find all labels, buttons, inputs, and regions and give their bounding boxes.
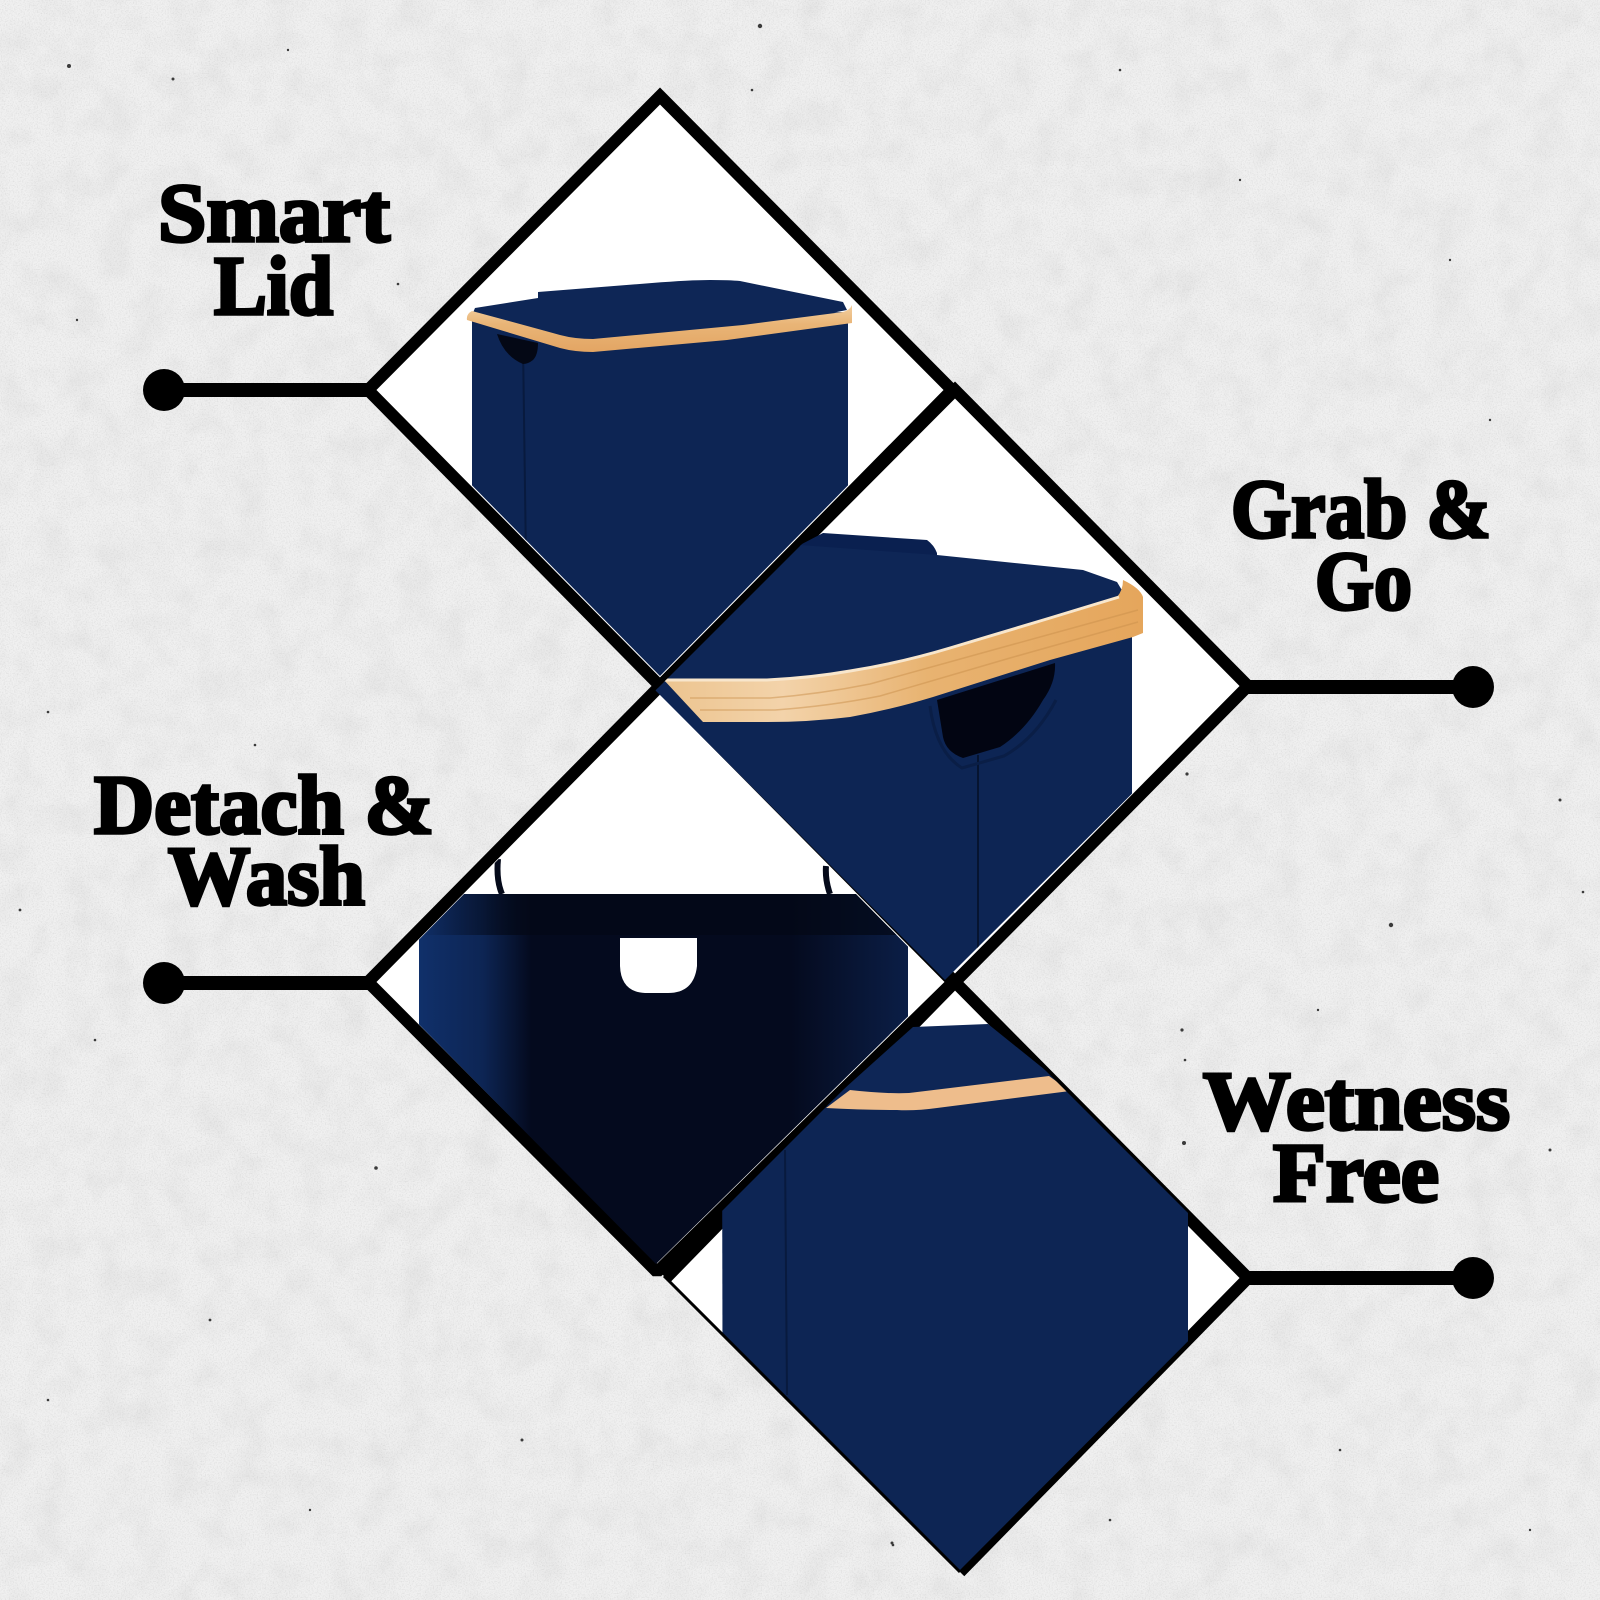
panel: detach and wash diamond [143,686,953,1300]
heading: grab and go: Grab & [1231,463,1491,556]
panel: wetness free diamond [664,982,1494,1600]
heading: smart lid [158,167,390,333]
panel: smart lid diamond [143,96,952,690]
panel: grab and go diamond [640,390,1494,1000]
heading: grab and go: Go [1315,535,1412,628]
heading: smart lid: Lid [214,240,333,333]
product: box with lid [467,280,852,690]
connector: smart lid [143,369,368,411]
product: close-up box [640,533,1143,1000]
heading: wetness free [1203,1055,1510,1220]
product: liner bag [419,859,908,1300]
heading: detach and wash: Detach & [94,759,434,852]
heading: smart lid: Smart [158,167,390,260]
heading: detach and wash: Wash [168,830,365,923]
product: box from the front [722,1024,1188,1600]
heading: detach and wash [94,759,434,923]
heading: wetness free: Free [1273,1127,1439,1220]
heading: grab and go [1231,463,1491,628]
heading: wetness free: Wetness [1203,1055,1510,1148]
connector: detach and wash [143,962,368,1004]
connector: wetness free [1248,1257,1494,1299]
connector: grab and go [1248,666,1494,708]
edge: thin lower left [664,1276,960,1572]
